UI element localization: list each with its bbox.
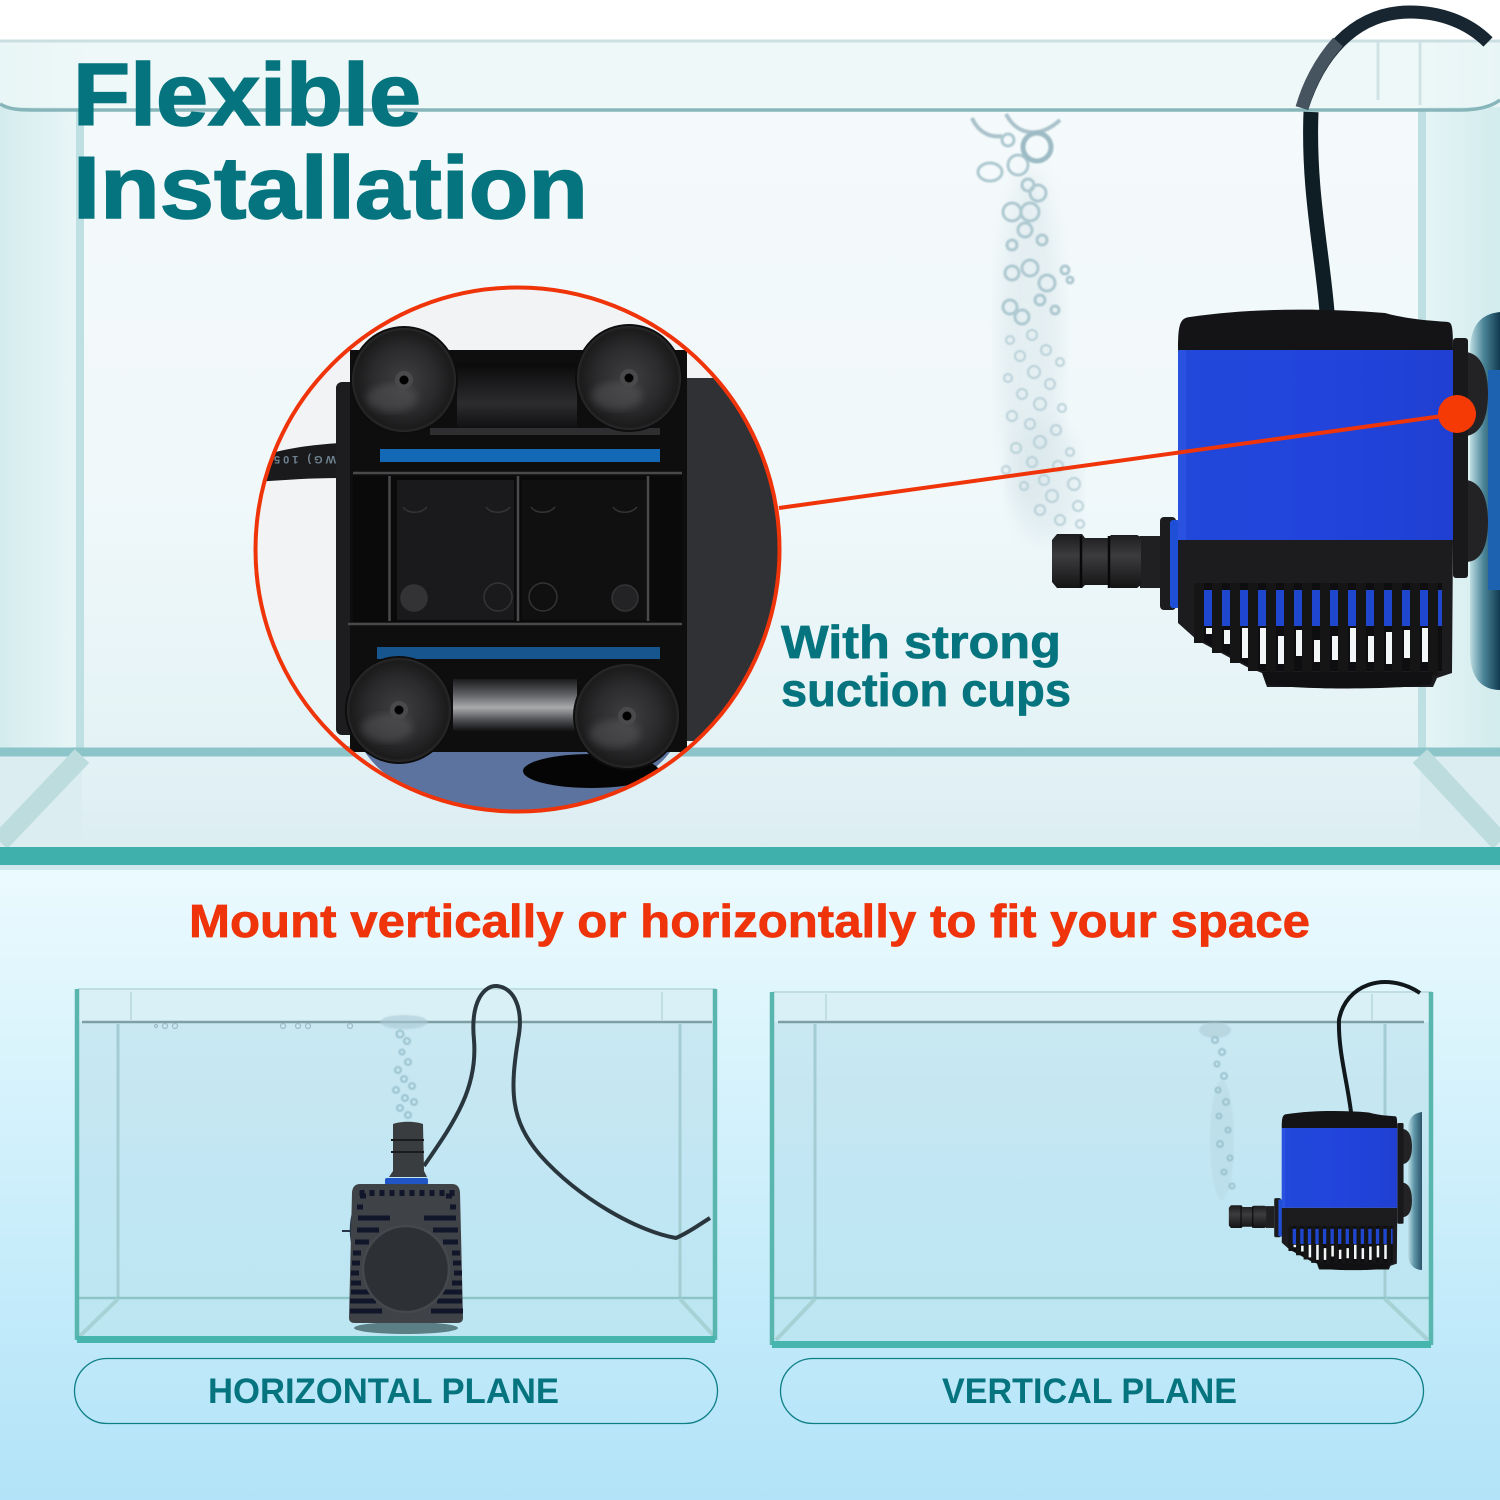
callout text: suction cups bbox=[781, 616, 1071, 716]
panel: horizontal plane tank bbox=[76, 986, 716, 1343]
surface micro-bubbles bbox=[154, 1024, 352, 1028]
panel: main aquarium photo background bbox=[0, 0, 1500, 870]
grey mounting plate bbox=[687, 378, 778, 741]
title bbox=[73, 45, 588, 237]
label pill: horizontal plane: HORIZONTAL PLANE bbox=[208, 1372, 559, 1411]
cable: horizontal tank bbox=[424, 986, 710, 1238]
label pill: horizontal plane bbox=[74, 1358, 718, 1424]
bubbles: horizontal tank bbox=[380, 1015, 428, 1118]
panel: vertical plane tank bbox=[771, 982, 1432, 1348]
title: Flexible bbox=[73, 45, 421, 144]
suction cup: top right bbox=[576, 325, 682, 431]
label pill: vertical plane bbox=[780, 1358, 1424, 1424]
callout text: suction cups: With strong bbox=[781, 616, 1061, 668]
suction cup: bottom right bbox=[574, 663, 680, 769]
cable: main pump power cord bbox=[1302, 12, 1488, 312]
intake slots bbox=[350, 1190, 463, 1311]
cable inside lens bbox=[266, 443, 336, 482]
shadow under pump bbox=[365, 752, 670, 812]
callout text: suction cups: suction cups bbox=[781, 664, 1071, 716]
bubbles: vertical tank bbox=[1199, 1022, 1234, 1200]
pump underside bbox=[336, 350, 687, 752]
bubbles rising in main tank bbox=[972, 114, 1084, 540]
callout: magnified suction cups bbox=[250, 280, 790, 820]
cable inside lens: WG) 105 bbox=[274, 453, 336, 465]
suction cup: bottom left bbox=[346, 657, 452, 763]
heading: mount vertically or horizontally: Mount vertically or horizontally to fit your space bbox=[189, 895, 1310, 947]
large pump on tank wall bbox=[1052, 310, 1500, 690]
title: Installation bbox=[73, 138, 588, 237]
panel: lower blue section background bbox=[0, 870, 1500, 1500]
pump: vertical orientation bbox=[1229, 1111, 1422, 1270]
label pill: vertical plane: VERTICAL PLANE bbox=[942, 1372, 1237, 1411]
callout pointer line and dot bbox=[779, 395, 1476, 508]
suction cup: top left bbox=[351, 327, 457, 433]
pump: horizontal orientation bbox=[342, 1122, 463, 1334]
cable: vertical tank bbox=[1339, 982, 1420, 1112]
